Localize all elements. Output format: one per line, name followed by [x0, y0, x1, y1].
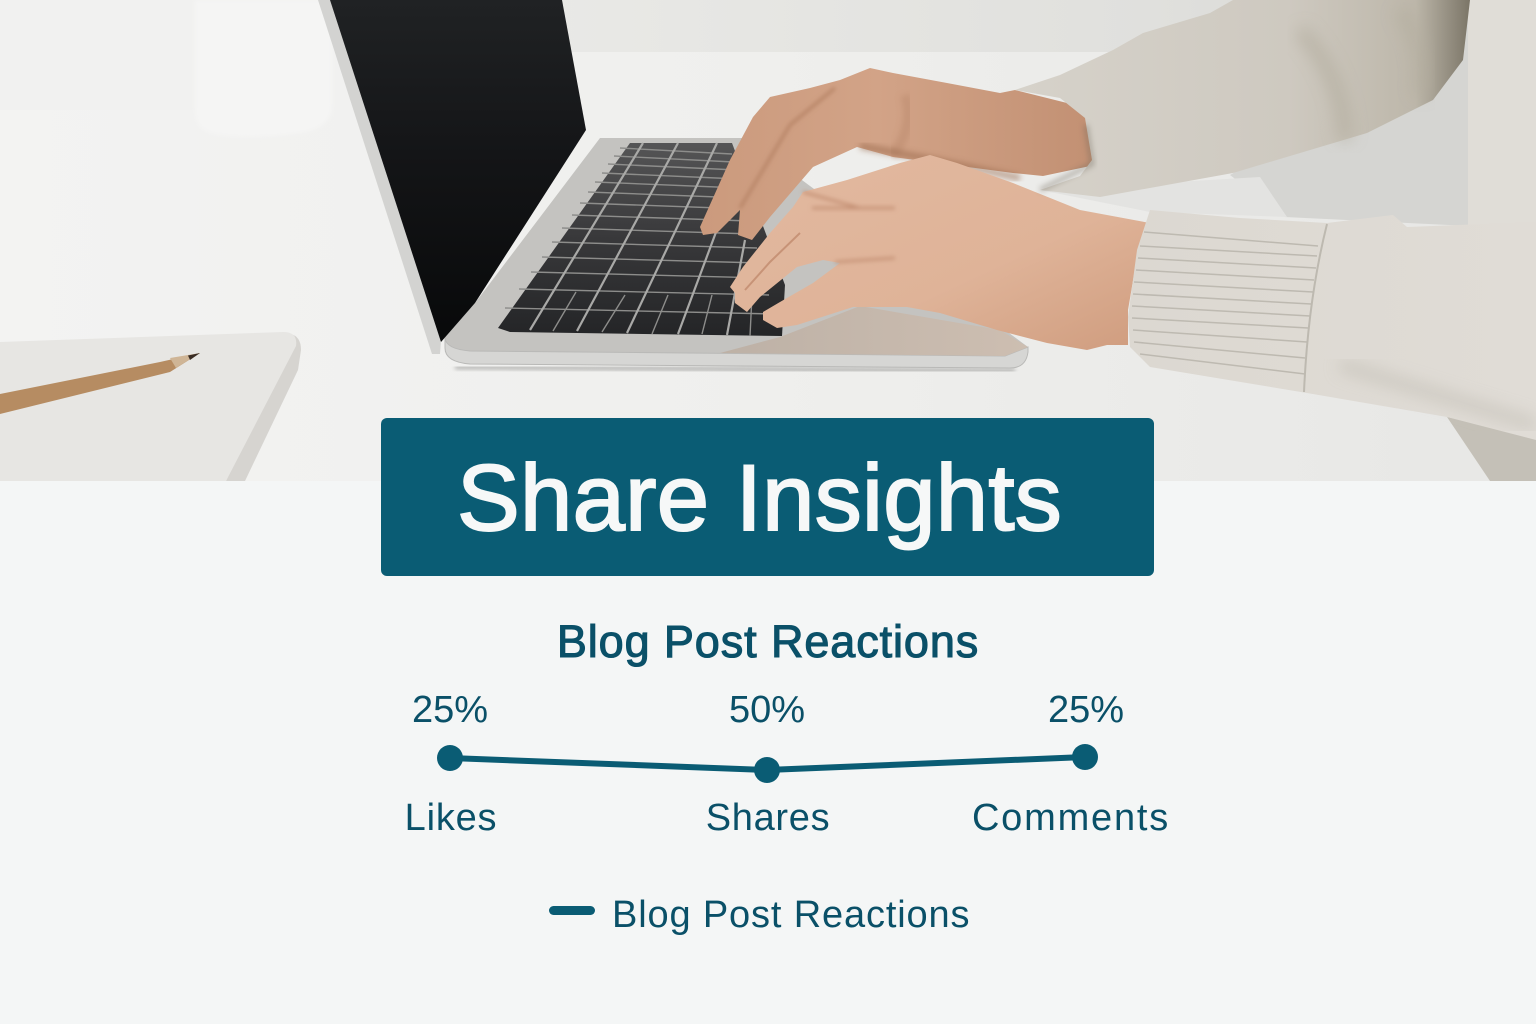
line chart: blog post reactions: 50% [729, 689, 805, 731]
keyboard [498, 143, 785, 336]
line chart: blog post reactions: 25% [1048, 689, 1124, 731]
line chart: blog post reactions: Likes [405, 797, 497, 839]
object: white cup [195, 0, 332, 137]
panel: lower light background [0, 481, 1536, 1024]
sweater: forearm and ribbed cuff [1128, 210, 1536, 440]
laptop deck [445, 138, 1028, 368]
sweater: upper arm [1015, 0, 1536, 226]
line chart: blog post reactions: 25% [412, 689, 488, 731]
icon: back hand [700, 68, 1095, 240]
line chart: blog post reactions: Shares [706, 797, 830, 839]
legend label: Blog Post Reactions [612, 894, 970, 936]
line chart: blog post reactions: Comments [972, 797, 1170, 839]
laptop front lip [445, 338, 1028, 368]
title text: Share Insights [457, 445, 1062, 550]
object: notebook and pencil [0, 332, 301, 481]
torso below the arm [1447, 417, 1536, 481]
legend swatch [549, 906, 595, 915]
laptop lid edge [318, 0, 441, 354]
chart heading: Blog Post Reactions [557, 616, 979, 667]
title banner [381, 418, 1154, 576]
photo: hands typing on a laptop [0, 0, 1536, 481]
icon: laptop [318, 0, 1028, 371]
icon: front hand [730, 155, 1150, 350]
wall behind the arms [1230, 40, 1470, 226]
trackpad area reflection [720, 306, 1028, 356]
line chart: blog post reactions [405, 689, 1170, 839]
laptop screen [330, 0, 586, 342]
desk corner below the sleeve [1040, 177, 1287, 217]
legend [549, 894, 970, 936]
